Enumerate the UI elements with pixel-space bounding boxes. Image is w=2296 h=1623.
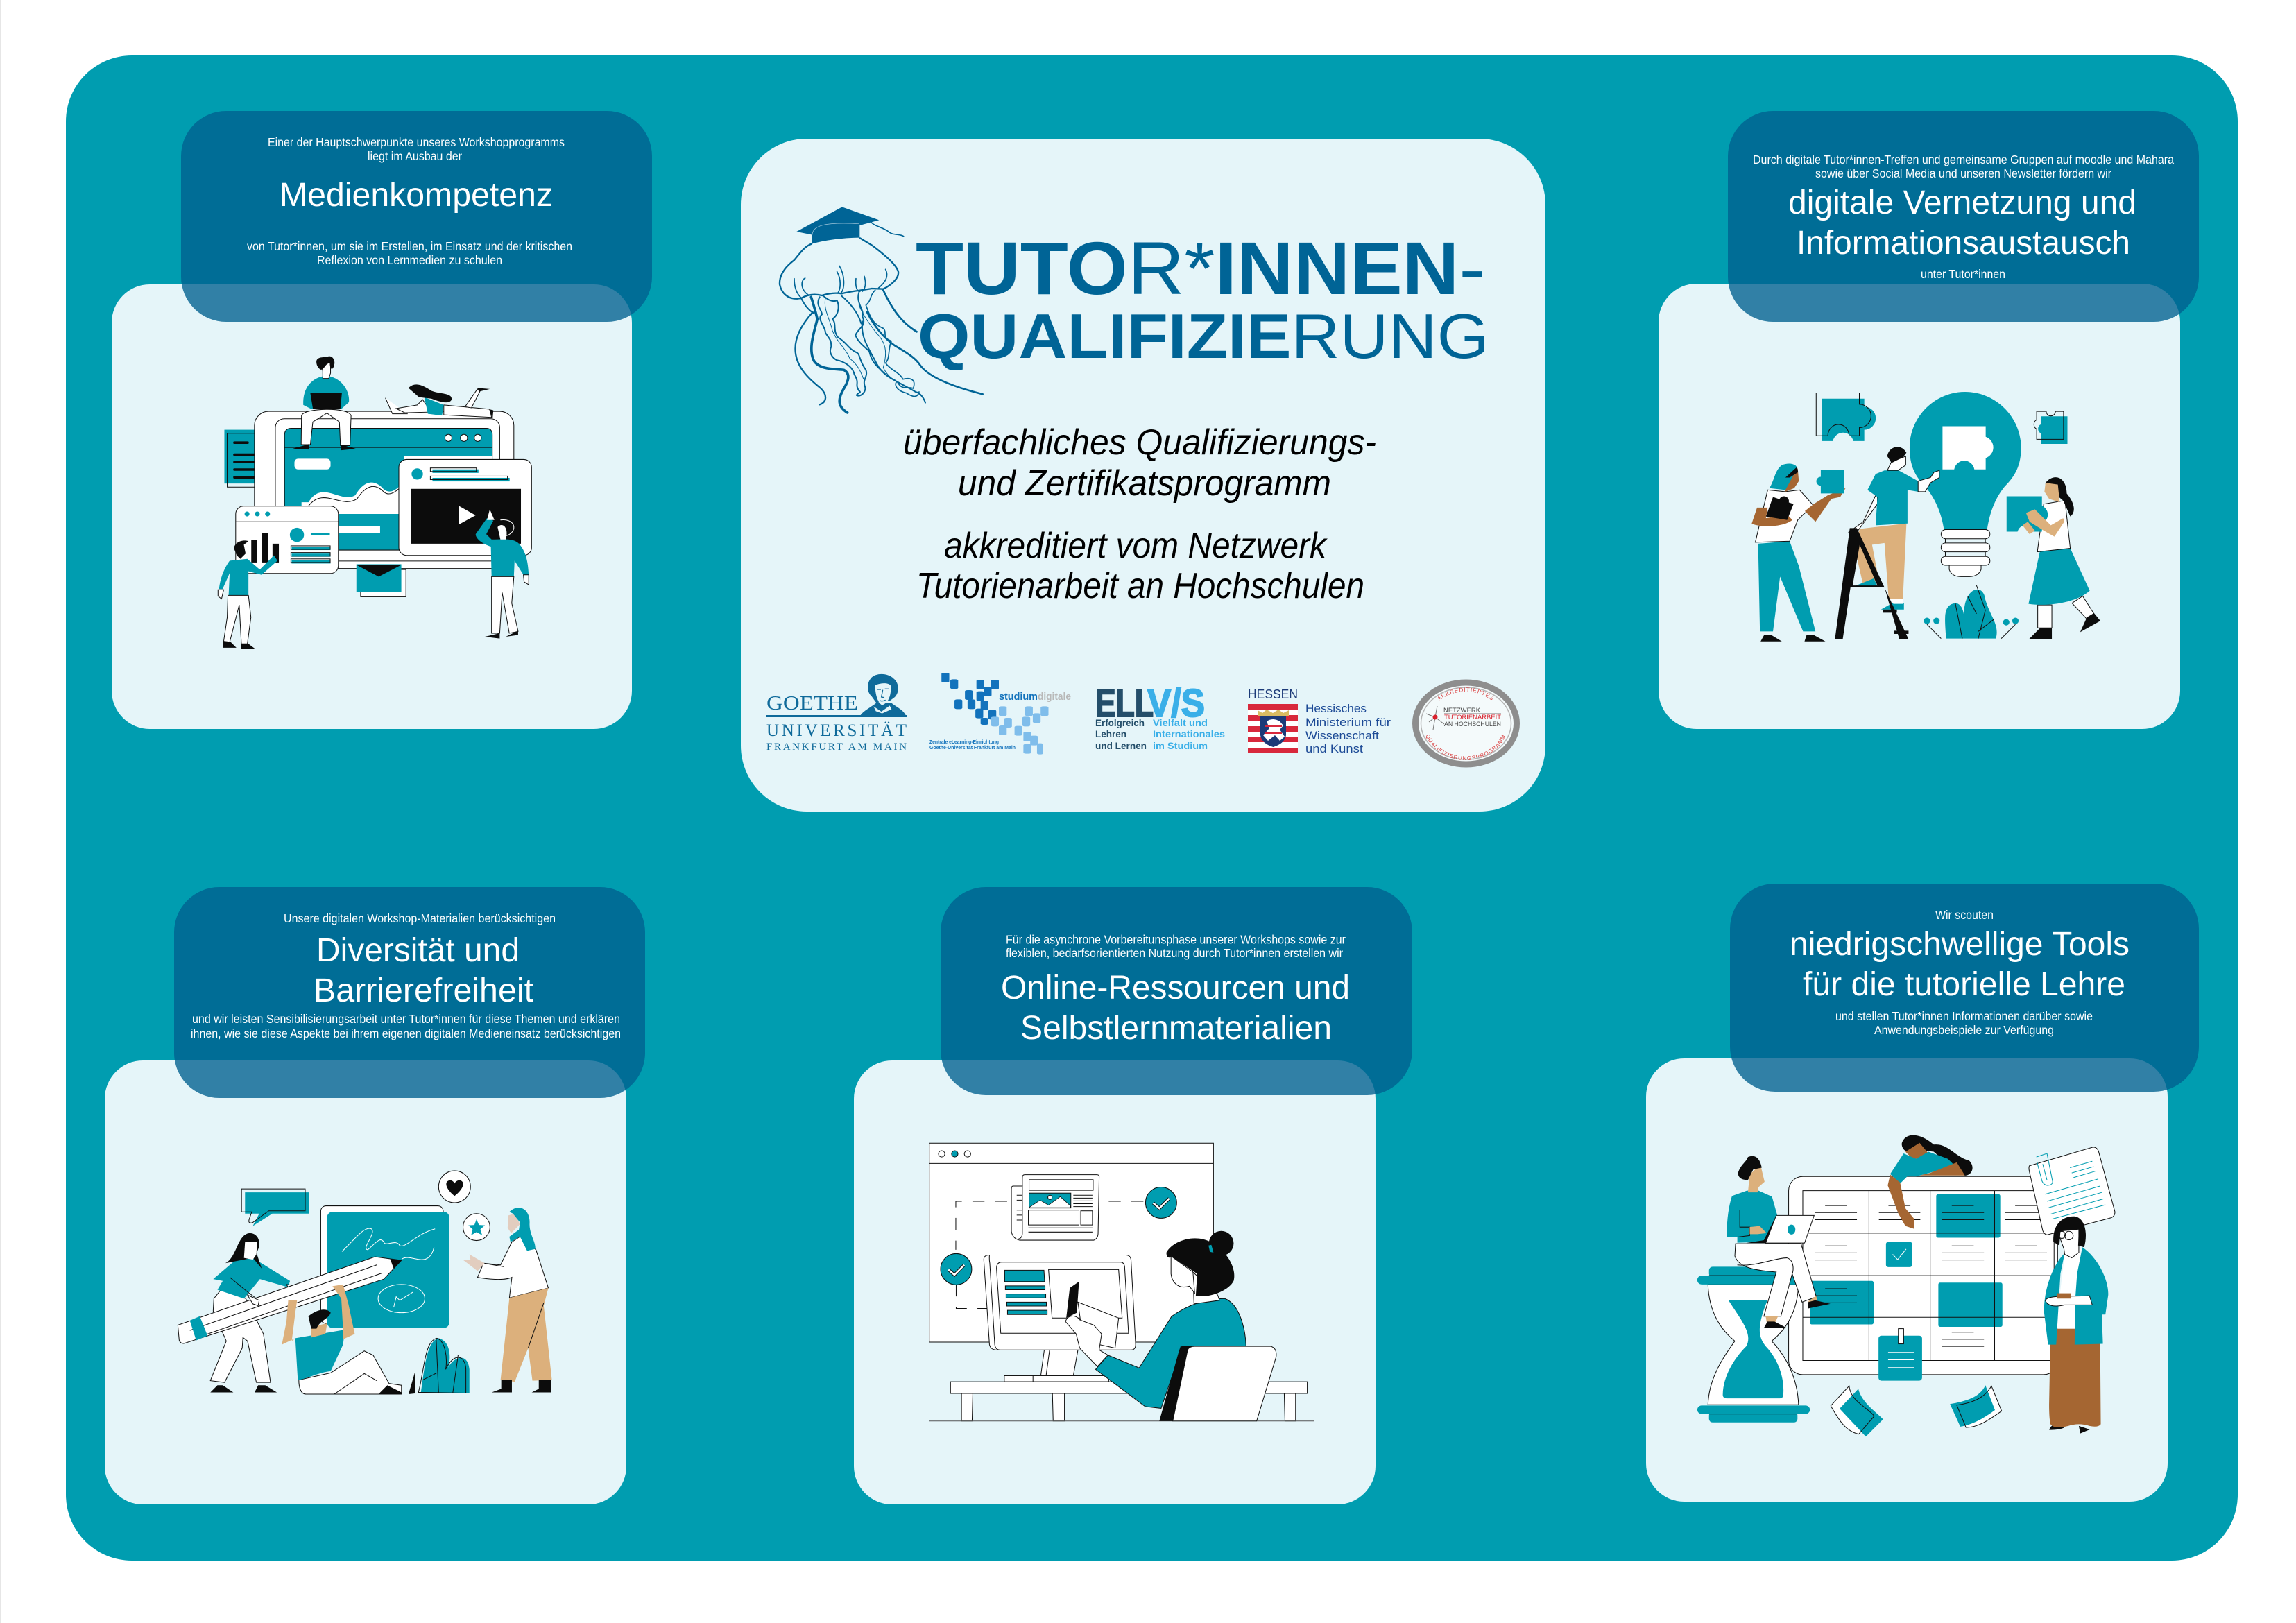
callout: Diversität und Barrierefreiheit: und wir leisten Sensibilisierungsarbeit unter Tutor*innen für diese Themen und erklären	[192, 1012, 620, 1026]
logo: ELLVIS: Vielfalt und	[1153, 717, 1208, 728]
logo: Goethe-Universität: GOETHE	[766, 692, 858, 714]
logo: Goethe-Universität: FRANKFURT AM MAIN	[766, 741, 907, 753]
callout: niedrigschwellige Tools: für die tutorielle Lehre	[1803, 966, 2125, 1003]
logo: Goethe-Universität	[766, 674, 907, 753]
logo: Hessen: Wissenschaft	[1305, 729, 1379, 742]
callout: niedrigschwellige Tools: Wir scouten	[1935, 908, 1994, 922]
callout: niedrigschwellige Tools	[1730, 884, 2199, 1092]
callout: digitale Vernetzung: Durch digitale Tutor*innen-Treffen und gemeinsame Gruppen auf moodle und Mahara	[1753, 153, 2174, 166]
logo: accreditation seal: QUALIFIZIERUNGSPROGRAMM	[1426, 735, 1505, 760]
panel: Diversität und Barrierefreiheit	[105, 887, 645, 1504]
illustration: people around calendar and hourglass	[1697, 1135, 2115, 1436]
logo: studiumdigitale: Zentrale eLearning-Einrichtung	[929, 740, 999, 745]
callout: digitale Vernetzung: sowie über Social Media und unseren Newsletter fördern wir	[1815, 166, 2111, 180]
heading: Tutor*innen-Qualifizierung	[916, 226, 1489, 372]
text block: subtitle: Tutorienarbeit an Hochschulen	[916, 566, 1364, 606]
callout: Online-Ressourcen: Selbstlernmaterialien	[1020, 1010, 1332, 1047]
logo: Hessen: und Kunst	[1305, 742, 1363, 755]
logo: studiumdigitale: Goethe-Universität Frankfurt am Main	[929, 746, 1016, 750]
callout: niedrigschwellige Tools: niedrigschwellige Tools	[1790, 926, 2130, 963]
callout: Online-Ressourcen: flexiblen, bedarfsorientierten Nutzung durch Tutor*innen erstellen wir	[1006, 946, 1343, 960]
panel: centre title	[741, 139, 1545, 812]
logo: ELLVIS: und Lernen	[1095, 740, 1147, 751]
callout: niedrigschwellige Tools: Anwendungsbeispiele zur Verfügung	[1874, 1023, 2054, 1037]
logo: accreditation seal: NETZWERK	[1443, 707, 1481, 714]
logo: Hessen	[1248, 687, 1391, 755]
logo: accreditation seal: AKKREDITIERTES	[1438, 687, 1493, 701]
panel: digitale Vernetzung	[1659, 111, 2199, 729]
logo: studiumdigitale	[929, 673, 1071, 755]
callout: Medienkompetenz	[181, 111, 652, 322]
callout: digitale Vernetzung	[1728, 111, 2199, 322]
text block: subtitle: und Zertifikatsprogramm	[958, 463, 1331, 504]
heading: Tutor*innen-Qualifizierung: QUALIFIZIE RUNG	[918, 302, 1489, 372]
callout: Online-Ressourcen: Für die asynchrone Vorbereitunsphase unserer Workshops sowie zur	[1006, 932, 1346, 946]
text block: subtitle: akkreditiert vom Netzwerk	[944, 526, 1328, 566]
callout: digitale Vernetzung: digitale Vernetzung und	[1788, 184, 2136, 221]
logo: accreditation seal	[1412, 680, 1520, 767]
callout: Diversität und Barrierefreiheit: Unsere digitalen Workshop-Materialien berücksichtigen	[284, 911, 556, 925]
callout: niedrigschwellige Tools: und stellen Tutor*innen Informationen darüber sowie	[1835, 1009, 2093, 1023]
logo: ELLVIS: im Studium	[1153, 740, 1208, 751]
logo: studiumdigitale: studium	[999, 691, 1038, 703]
callout: Diversität und Barrierefreiheit: ihnen, wie sie diese Aspekte bei ihrem eigenen digitalen Medieneinsatz berücksichtigen	[191, 1027, 621, 1040]
logo: Hessen: Hessisches	[1305, 702, 1367, 715]
logo: Hessen: Ministerium für	[1305, 716, 1391, 729]
logo: ELLVIS	[1095, 681, 1225, 751]
panel: Online-Ressourcen	[854, 887, 1412, 1504]
callout: Online-Ressourcen: Online-Ressourcen und	[1001, 970, 1350, 1006]
logo: ELLVIS: Erfolgreich	[1095, 717, 1145, 728]
icon: jellyfish with graduation cap	[780, 207, 983, 413]
panel: niedrigschwellige Tools	[1646, 884, 2199, 1502]
logo: ELLVIS: V/S	[1147, 681, 1205, 725]
text block: subtitle	[903, 422, 1376, 606]
callout: Medienkompetenz: von Tutor*innen, um sie im Erstellen, im Einsatz und der kritischen	[247, 239, 572, 253]
heading: Tutor*innen-Qualifizierung: TUTOR*INNEN-	[916, 226, 1485, 310]
callout: Online-Ressourcen	[941, 887, 1412, 1095]
callout: digitale Vernetzung: Informationsaustausch	[1797, 225, 2130, 261]
logo: accreditation seal: AN HOCHSCHULEN	[1444, 721, 1501, 728]
logo: ELLVIS: Internationales	[1153, 728, 1225, 739]
callout: digitale Vernetzung: unter Tutor*innen	[1921, 267, 2005, 281]
logo: Goethe-Universität: UNIVERSITÄT	[766, 721, 907, 740]
callout: Diversität und Barrierefreiheit	[174, 887, 645, 1098]
illustration: team assembling a puzzle lightbulb	[1751, 392, 2100, 642]
illustration: woman at desk with monitor	[929, 1143, 1314, 1421]
callout: Diversität und Barrierefreiheit: Diversität und	[316, 932, 520, 969]
illustration: people with giant pencil and board	[178, 1171, 552, 1394]
callout: Medienkompetenz: Medienkompetenz	[280, 177, 553, 214]
callout: Medienkompetenz: Reflexion von Lernmedien zu schulen	[317, 253, 502, 267]
text block: subtitle: überfachliches Qualifizierungs-	[903, 422, 1376, 463]
panel: Medienkompetenz	[112, 111, 652, 729]
logo: ELLVIS: Lehren	[1095, 728, 1126, 739]
logo: Hessen: HESSEN	[1248, 687, 1298, 701]
callout: Medienkompetenz: liegt im Ausbau der	[368, 149, 462, 163]
callout: Medienkompetenz: Einer der Hauptschwerpunkte unseres Workshopprogramms	[268, 135, 565, 149]
logo: accreditation seal: TUTORIENARBEIT	[1444, 714, 1501, 721]
illustration: people around media screens	[218, 357, 531, 649]
callout: Diversität und Barrierefreiheit: Barrierefreiheit	[314, 972, 533, 1009]
logo: studiumdigitale: digitale	[1038, 691, 1071, 703]
logo: ELLVIS: ELL	[1095, 681, 1154, 725]
